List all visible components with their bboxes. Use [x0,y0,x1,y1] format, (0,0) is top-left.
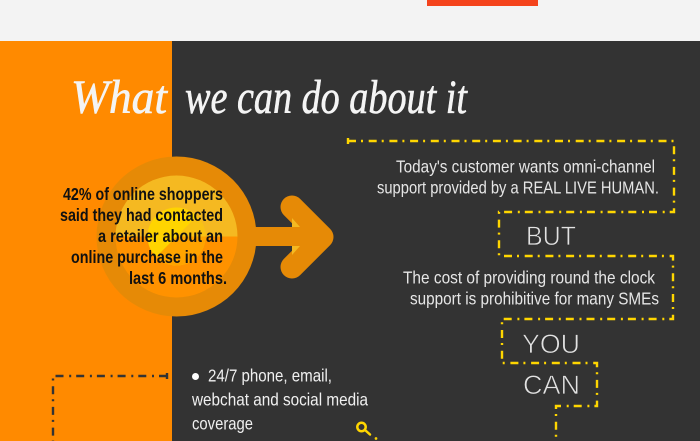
bullet list item: webchat and social media [191,390,368,410]
icon: magnifier [357,423,377,439]
yellow dashed connector [348,138,674,441]
title [71,71,468,124]
word: CAN: CAN [523,370,580,400]
text: omni-channel support: Today's customer wants omni-channel [396,156,655,176]
stat text: last 6 months. [129,268,227,288]
panel: dark column [172,41,700,441]
stat text: 42% of online shoppers [63,184,223,204]
word: YOU: YOU [522,329,580,359]
bullet list item: coverage [192,414,253,434]
title: What [71,71,169,124]
dark dashed connector [53,373,167,441]
stat text: said they had contacted [60,205,223,225]
stat text [60,184,227,288]
stat text: a retailer about an [98,226,223,246]
title: we can do about it [185,71,468,124]
word: BUT: BUT [526,221,576,251]
top section background [0,0,700,41]
text: cost of support: The cost of providing round the clock [403,268,655,288]
bullet list item: 24/7 phone, email, [208,366,332,386]
text: omni-channel support [377,156,659,198]
text: cost of support: support is prohibitive for many SMEs [410,288,659,308]
stat text: online purchase in the [71,247,223,267]
text: cost of support [403,268,659,308]
red tab [427,0,538,6]
chart: concentric circle and arrow [96,156,322,316]
bullet list item [191,366,368,434]
panel: orange column [0,41,172,441]
